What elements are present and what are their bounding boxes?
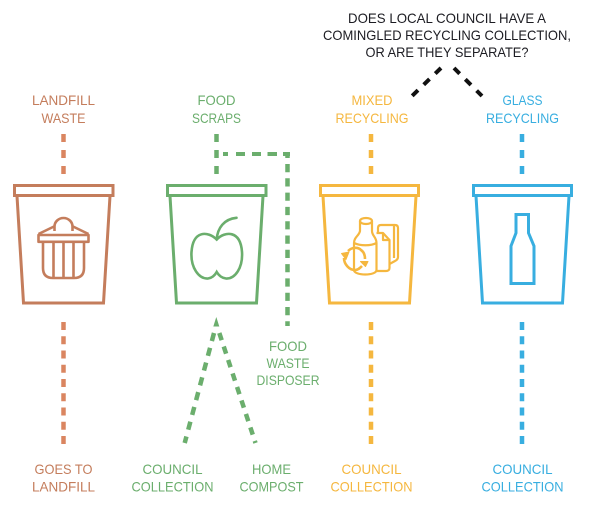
dashed line to outcome bbox=[369, 322, 373, 444]
icon: glass bottle bbox=[511, 214, 534, 284]
heading: mixed recycling: MIXED bbox=[352, 92, 392, 108]
dashed line to bin bbox=[520, 134, 524, 182]
outcome: goes to landfill bbox=[32, 461, 95, 494]
panel: glass recycling bbox=[474, 92, 572, 494]
heading: mixed recycling: RECYCLING bbox=[336, 110, 408, 126]
bin: blue bbox=[474, 186, 572, 303]
question callout bbox=[323, 10, 571, 96]
question text: DOES LOCAL COUNCIL HAVE A bbox=[348, 10, 547, 26]
dashed branch to food waste disposer bbox=[223, 152, 290, 326]
outcome: goes to landfill: LANDFILL bbox=[32, 478, 95, 494]
dashed line to outcome bbox=[61, 322, 66, 444]
outcome: council collection: COUNCIL bbox=[342, 461, 402, 477]
heading: mixed recycling bbox=[336, 92, 408, 126]
dashed line to bin bbox=[214, 134, 219, 182]
dashed line to bin bbox=[369, 134, 373, 182]
heading: food scraps: SCRAPS bbox=[192, 110, 241, 126]
label: food waste disposer: FOOD bbox=[269, 338, 307, 354]
dashed line to council collection bbox=[185, 333, 214, 443]
heading: landfill waste: WASTE bbox=[42, 110, 86, 126]
outcome: council collection: COUNCIL bbox=[492, 461, 553, 477]
heading: glass recycling: RECYCLING bbox=[486, 110, 559, 126]
outcome: home compost: COMPOST bbox=[240, 478, 304, 494]
heading: landfill waste bbox=[32, 92, 95, 126]
icon: apple bbox=[191, 218, 242, 279]
icon: trash can bbox=[38, 218, 88, 278]
outcome: home compost: HOME bbox=[252, 461, 291, 477]
panel: food scraps bbox=[132, 92, 320, 494]
outcome: council collection: COLLECTION bbox=[482, 478, 564, 494]
heading: landfill waste: LANDFILL bbox=[32, 92, 95, 108]
dashed line to home compost bbox=[219, 333, 256, 443]
outcome: goes to landfill: GOES TO bbox=[34, 461, 93, 477]
bin: yellow bbox=[320, 186, 418, 303]
panel: landfill waste bbox=[14, 92, 113, 494]
label: food waste disposer: WASTE bbox=[266, 355, 310, 371]
question text: COMINGLED RECYCLING COLLECTION, bbox=[323, 27, 571, 43]
outcome: council collection bbox=[330, 461, 412, 494]
outcome: home compost bbox=[240, 461, 304, 494]
outcome: council collection: COLLECTION bbox=[132, 478, 214, 494]
heading: food scraps: FOOD bbox=[198, 92, 236, 108]
label: food waste disposer: DISPOSER bbox=[256, 372, 320, 388]
dashed line to outcome bbox=[520, 322, 524, 444]
question text: OR ARE THEY SEPARATE? bbox=[366, 44, 529, 60]
arrow tip bbox=[213, 317, 219, 326]
question text bbox=[323, 10, 571, 60]
outcome: council collection bbox=[132, 461, 214, 494]
label: food waste disposer bbox=[256, 338, 320, 388]
icon: bottle, cartons and recycling arrows bbox=[342, 218, 398, 274]
outcome: council collection: COUNCIL bbox=[142, 461, 203, 477]
heading: glass recycling: GLASS bbox=[502, 92, 542, 108]
black dashed branches bbox=[412, 68, 482, 96]
panel: mixed recycling bbox=[320, 92, 418, 494]
bin: brown bbox=[14, 186, 113, 303]
dashed line to bin bbox=[61, 134, 66, 182]
outcome: council collection: COLLECTION bbox=[330, 478, 412, 494]
bin: green bbox=[168, 186, 266, 303]
outcome: council collection bbox=[482, 461, 564, 494]
heading: glass recycling bbox=[486, 92, 559, 126]
heading: food scraps bbox=[192, 92, 241, 126]
